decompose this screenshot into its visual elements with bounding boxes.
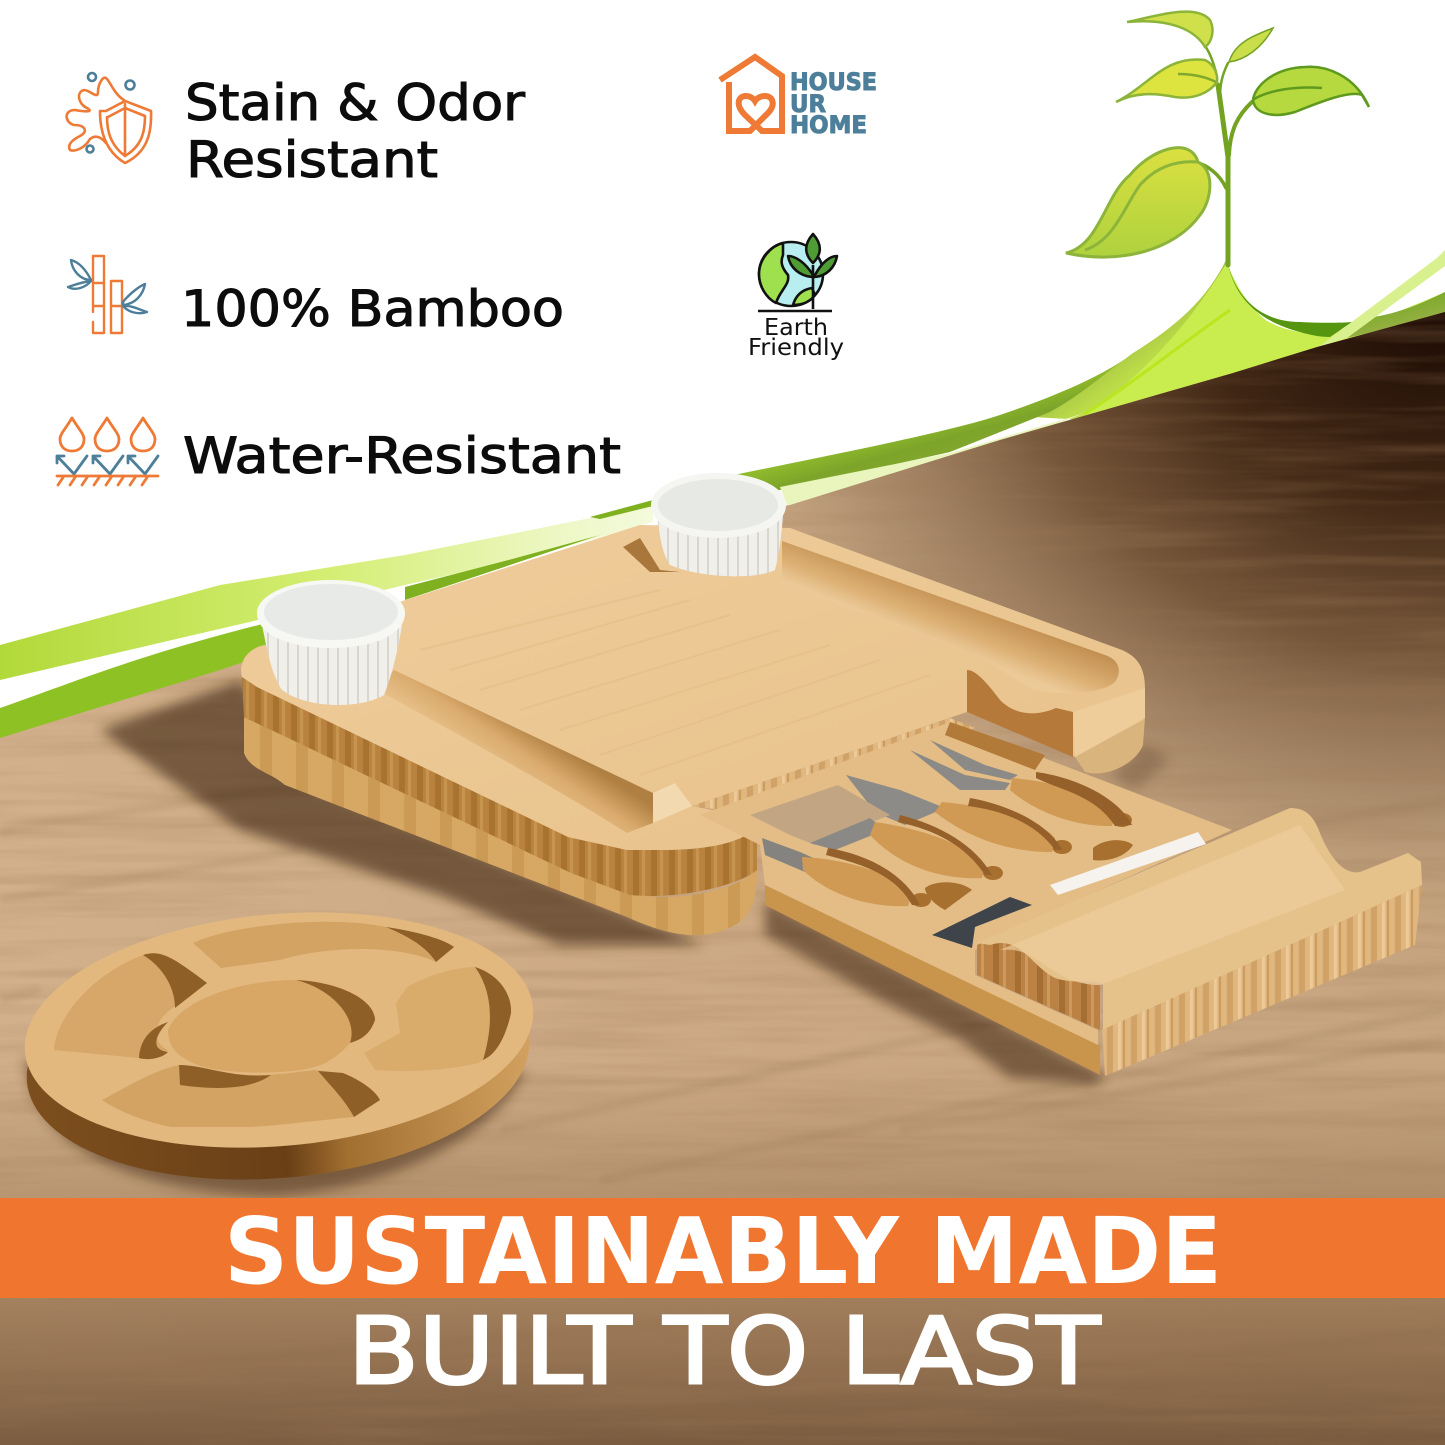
heading text second line: Resistant [186,131,438,189]
slate [932,897,1032,948]
heading text: Water-Resistant [183,427,621,485]
tray finger wells [911,813,1133,910]
tray lower side [765,885,1100,1075]
logo wordmark: HOME [790,111,867,139]
right block end face [1073,688,1145,757]
headline: sustainably made: SUSTAINABLY MADE [224,1198,1222,1305]
feature: water resistant [57,418,621,485]
stems [1195,43,1252,265]
bamboo board with drawer [241,525,1422,1076]
earth friendly badge [748,234,844,361]
tray top [15,892,543,1168]
heading text: Stain & Odor [185,74,525,132]
leaf: lower left [1066,148,1210,257]
leaf: right [1253,67,1369,115]
icon: house with heart [720,57,782,131]
board top frame [241,525,1145,850]
feature: stain and odor resistant [67,73,525,189]
badge text second line: Friendly [748,335,844,361]
floor shadows [25,680,1170,1195]
orange banner [0,1198,1445,1298]
center surface grain [420,590,930,775]
fork [910,740,1132,826]
tray top [700,722,1232,1045]
round bamboo tray [15,892,543,1200]
upper side layer [242,677,757,896]
compartment left [54,953,207,1059]
logo: house ur home [720,57,877,139]
tray side [17,920,539,1200]
leaf: middle left [1116,59,1217,102]
icon: globe with plant [758,234,837,311]
badge text: Earth [764,315,828,341]
leaf: small [1229,28,1273,62]
logo wordmark [790,68,877,139]
tray recess strip [945,722,1045,770]
right block side [1075,718,1145,773]
left channel [382,670,653,833]
headline: built to last: BUILT TO LAST [348,1298,1101,1405]
heading text: 100% Bamboo [181,280,564,338]
feature: 100 percent bamboo [68,256,564,338]
cheese knife 1 [846,775,1062,852]
ramekin bowls [257,473,786,705]
vein: middle left leaf [1178,74,1216,82]
wooden floor background [0,300,1445,1445]
leaf: top [1127,12,1212,47]
logo wordmark: HOUSE [790,68,877,96]
compartment bottom [102,1065,380,1127]
recess around back ramekin [623,538,680,572]
drawer back strip [692,718,975,815]
chalk [1050,832,1206,895]
lower side layer [244,717,757,935]
logo wordmark: UR [790,90,826,118]
cheese knife 3 [762,838,920,906]
vein: right leaf [1254,87,1322,99]
icon: bamboo [68,256,147,333]
back channel [782,541,1119,693]
drawer tray [700,722,1422,1076]
drawer front block [977,808,1422,1076]
notched right block [967,670,1073,757]
cheese knife 2 [750,785,992,878]
icon: splash and shield [67,73,151,163]
compartment center [168,980,375,1073]
right ramekin [651,473,786,576]
icon: water drops [57,418,158,485]
vein: lower left leaf [1085,162,1198,250]
left ramekin [257,580,405,705]
compartment right [364,967,511,1071]
compartment top [193,922,454,968]
plant sprout [1066,12,1369,265]
green ribbon wave [0,250,1445,740]
board raised tab [653,783,692,823]
